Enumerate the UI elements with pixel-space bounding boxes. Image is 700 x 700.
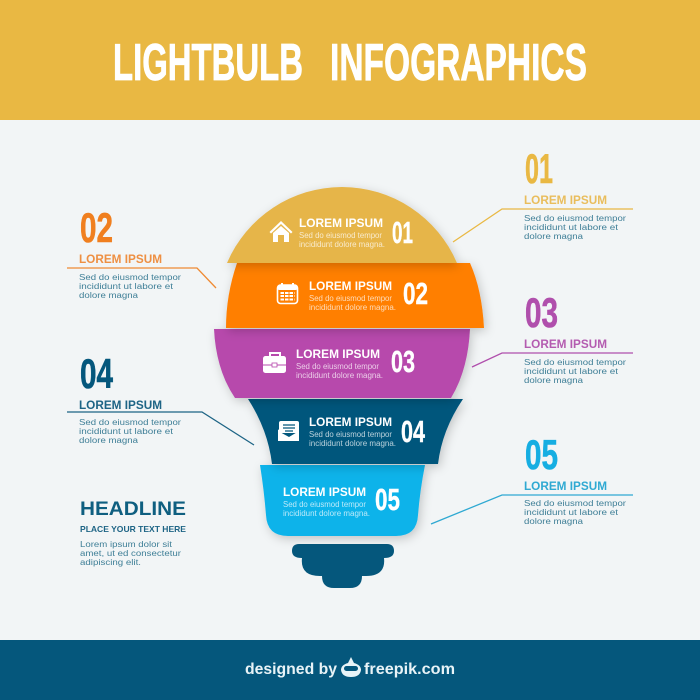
segment 02: [226, 263, 484, 328]
segment 05: 05: [375, 482, 400, 517]
segment 03: Sed do eiusmod tempor: [296, 362, 379, 371]
segment 02: incididunt dolore magna.: [309, 303, 396, 312]
callout 04: LOREM IPSUM: [79, 398, 162, 412]
segment 02: 02: [403, 276, 428, 311]
callout 02: incididunt ut labore et: [79, 282, 174, 291]
segment 01: Sed do eiusmod tempor: [299, 231, 382, 240]
segment 01: [227, 187, 457, 263]
footer site: freepik.com: [364, 661, 455, 678]
callout 01: [453, 145, 633, 242]
headline block: Lorem ipsum dolor sit: [80, 540, 173, 549]
callout 05: LOREM IPSUM: [524, 479, 607, 493]
callout 04: incididunt ut labore et: [79, 427, 174, 436]
callout 02: dolore magna: [79, 291, 139, 300]
segment 01: LOREM IPSUM: [299, 216, 383, 230]
callout 03: [472, 289, 633, 385]
segment 04: [248, 399, 463, 464]
icon: calendar: [278, 283, 298, 304]
icon: house: [270, 221, 292, 242]
segment 03: incididunt dolore magna.: [296, 371, 383, 380]
icon: freepik logo: [341, 657, 361, 677]
title: [113, 34, 587, 92]
callout 01: Sed do eiusmod tempor: [524, 214, 626, 223]
callout 05: [431, 431, 633, 526]
callout 03: LOREM IPSUM: [524, 337, 607, 351]
bulb base: [292, 544, 394, 588]
icon: envelope: [278, 421, 299, 441]
segment 01: 01: [392, 215, 413, 250]
segment 02: Sed do eiusmod tempor: [309, 294, 392, 303]
callout 04: 04: [80, 350, 113, 397]
segment 03: 03: [391, 344, 415, 379]
footer credit: designed by: [245, 661, 337, 678]
segment 04: LOREM IPSUM: [309, 415, 392, 429]
callout 02: [67, 204, 216, 300]
callout 03: 03: [525, 289, 558, 336]
headline block: PLACE YOUR TEXT HERE: [80, 524, 186, 534]
headline block: [80, 499, 186, 567]
headline block: HEADLINE: [80, 499, 186, 520]
callout 01: LOREM IPSUM: [524, 193, 607, 207]
segment 05: [260, 465, 425, 536]
icon: briefcase: [263, 353, 286, 373]
headline block: amet, ut ed consectetur: [80, 549, 181, 558]
callout 02: 02: [80, 204, 113, 251]
callout 04: Sed do eiusmod tempor: [79, 418, 181, 427]
callout 01: incididunt ut labore et: [524, 223, 619, 232]
callout 01: dolore magna: [524, 232, 584, 241]
callout 03: dolore magna: [524, 376, 584, 385]
segment 05: LOREM IPSUM: [283, 485, 366, 499]
segment 01: incididunt dolore magna.: [299, 240, 385, 249]
segment 03: LOREM IPSUM: [296, 347, 380, 361]
callout 05: dolore magna: [524, 517, 584, 526]
segment 04: 04: [401, 414, 426, 449]
callout 03: Sed do eiusmod tempor: [524, 358, 626, 367]
callout 02: Sed do eiusmod tempor: [79, 273, 181, 282]
lightbulb: [214, 187, 484, 588]
callout 04: [67, 350, 254, 445]
footer band: [0, 640, 700, 700]
callout 03: incididunt ut labore et: [524, 367, 619, 376]
segment 04: Sed do eiusmod tempor: [309, 430, 392, 439]
segment 04: incididunt dolore magna.: [309, 439, 396, 448]
callout 05: Sed do eiusmod tempor: [524, 499, 626, 508]
callout 01: 01: [525, 145, 553, 192]
segment 05: incididunt dolore magna.: [283, 509, 370, 518]
title: LIGHTBULB: [113, 34, 303, 92]
segment 02: LOREM IPSUM: [309, 279, 392, 293]
callout 05: incididunt ut labore et: [524, 508, 619, 517]
header band: [0, 0, 700, 120]
callout 02: LOREM IPSUM: [79, 252, 162, 266]
callout 05: 05: [525, 431, 558, 478]
segment 05: Sed do eiusmod tempor: [283, 500, 366, 509]
callout 04: dolore magna: [79, 436, 139, 445]
headline block: adipiscing elit.: [80, 558, 141, 567]
segment 03: [214, 329, 470, 398]
